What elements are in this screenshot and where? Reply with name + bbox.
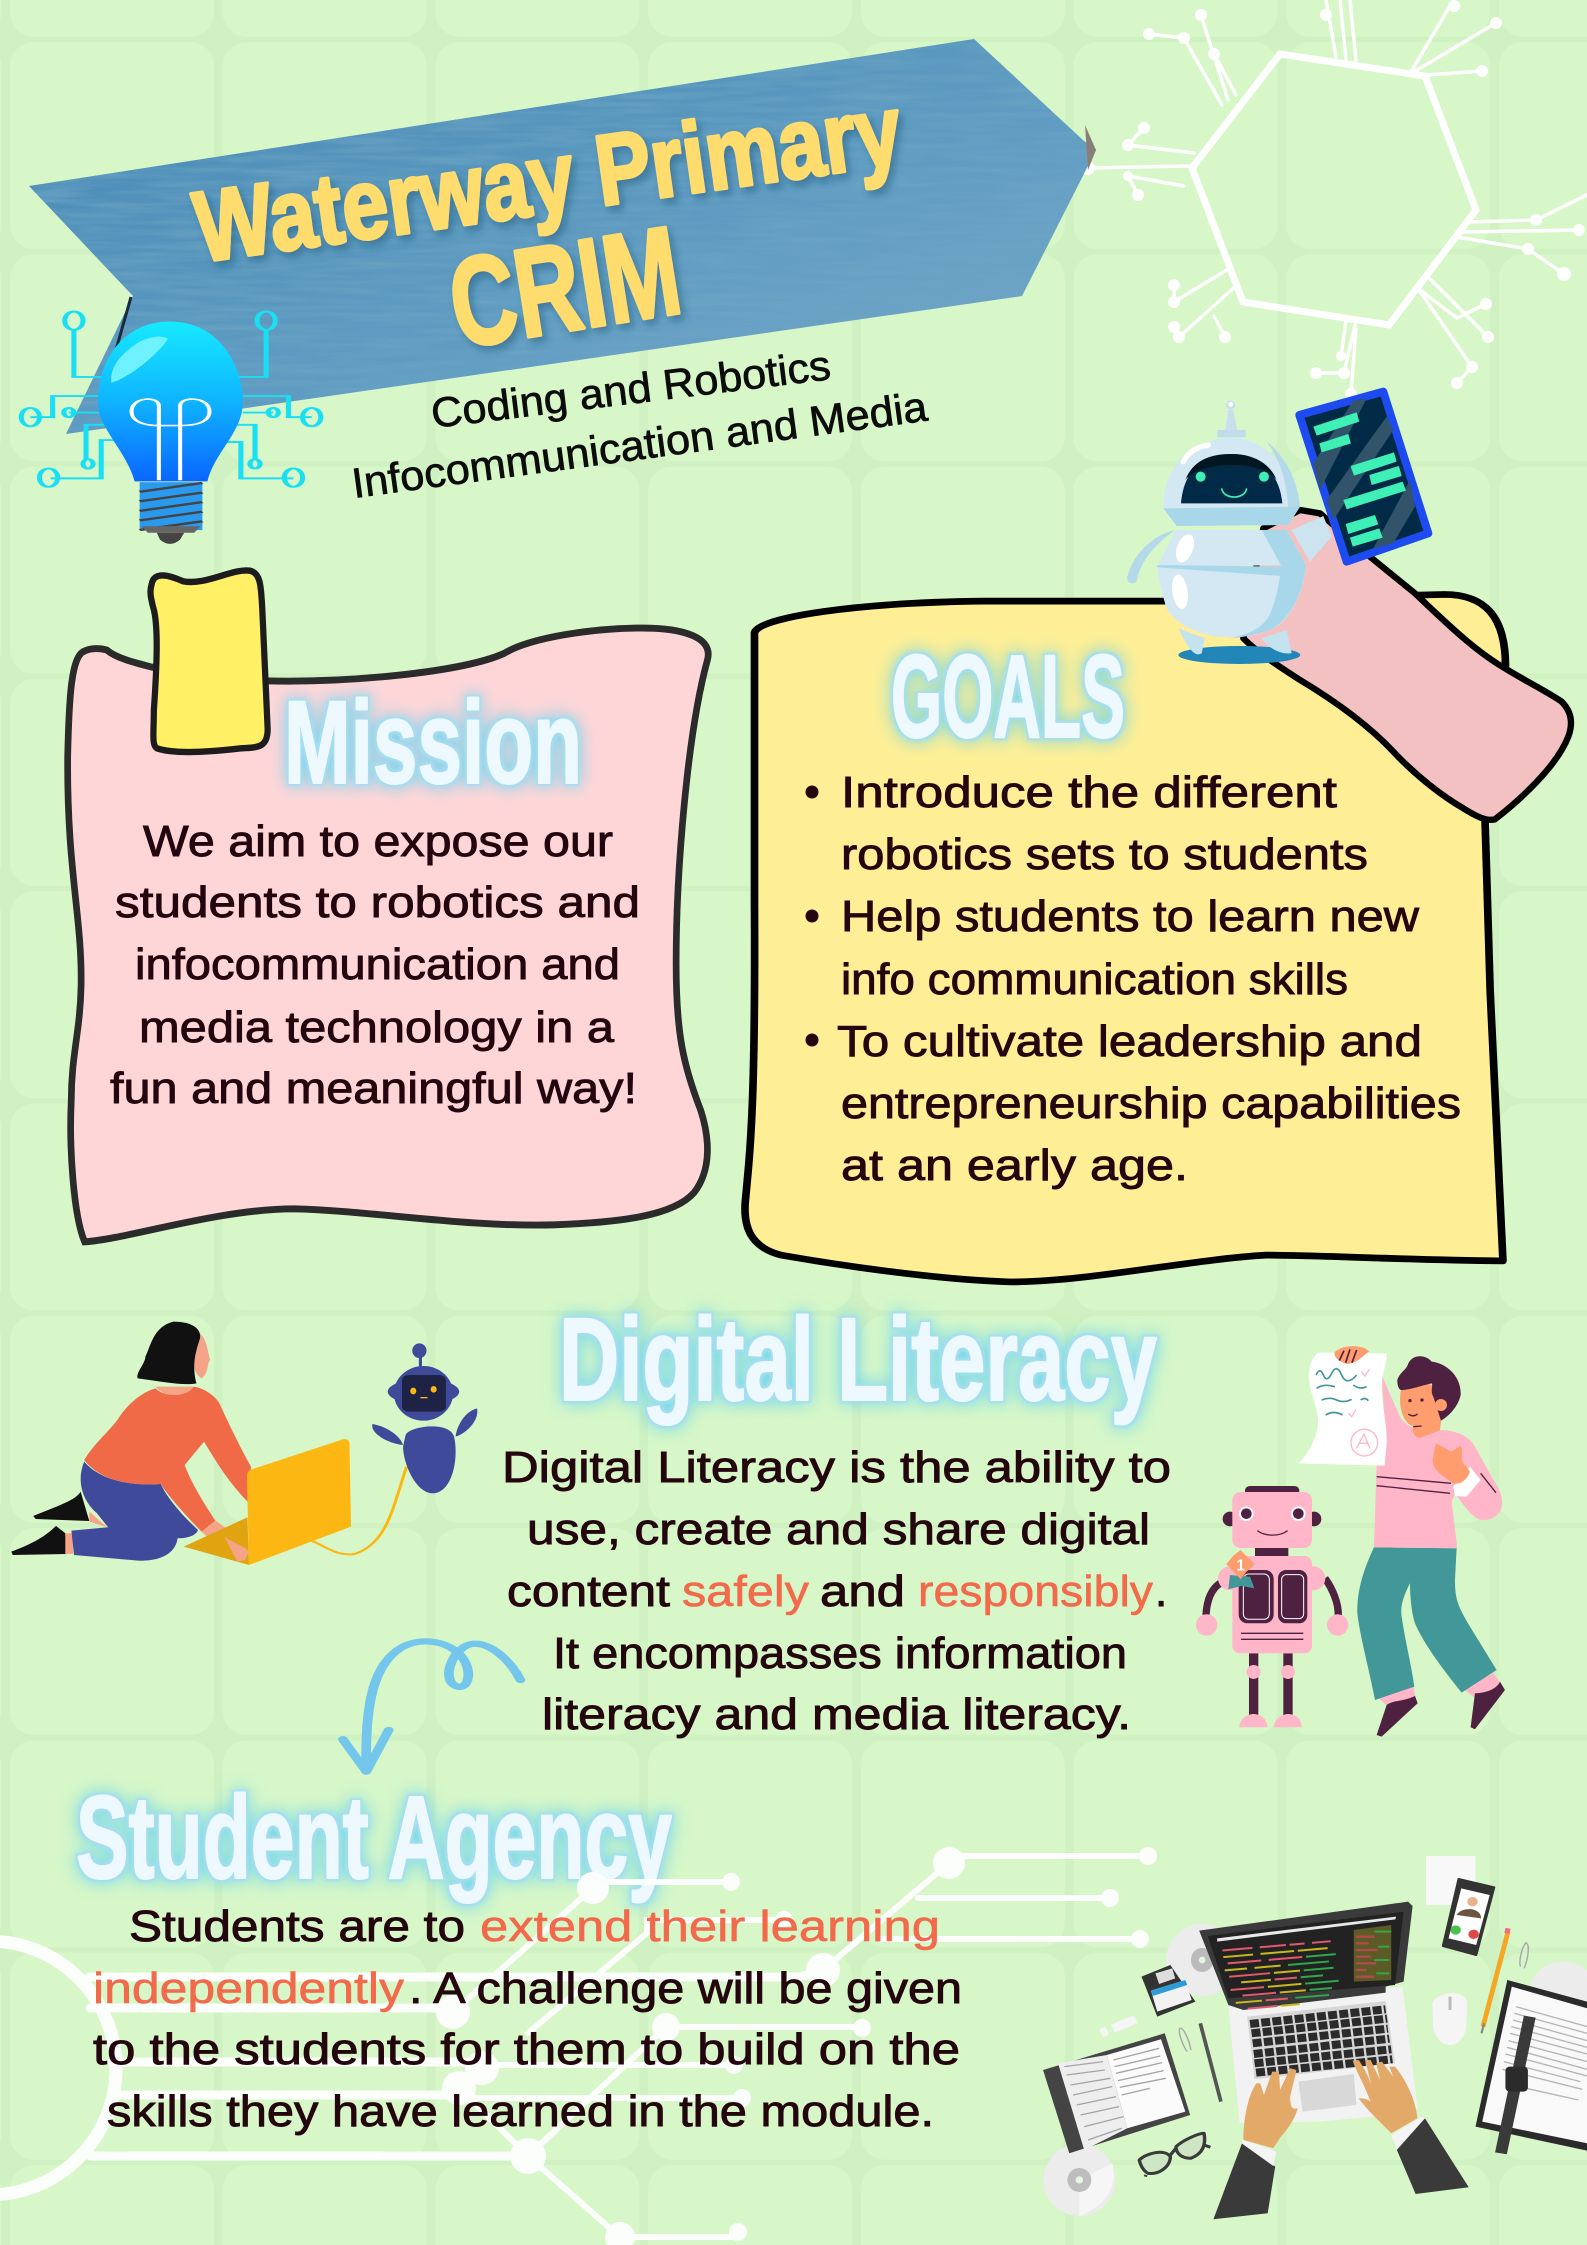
circuit lines, bottom left bbox=[0, 1847, 1157, 2245]
phone bbox=[1299, 392, 1428, 562]
goals list: info communication skills bbox=[841, 955, 1348, 1004]
CDs bbox=[1043, 1924, 1587, 2216]
illustration: robot and boy with graded paper bbox=[1196, 1346, 1505, 1737]
wooden sign banner with title bbox=[29, 39, 1096, 434]
heading: Student Agency: Student Agency bbox=[76, 1772, 672, 1904]
student agency text: independently bbox=[93, 1964, 404, 2013]
laptop bbox=[1199, 1902, 1417, 2123]
notepad and phone bbox=[1426, 1856, 1494, 1955]
illustration: arm holding robot and phone bbox=[1127, 392, 1571, 820]
goals note shape bbox=[745, 594, 1506, 1282]
student agency text: . A challenge will be given bbox=[409, 1964, 962, 2013]
student agency text: skills they have learned in the module. bbox=[107, 2087, 934, 2136]
mission text: students to robotics and bbox=[115, 878, 640, 927]
mission text: media technology in a bbox=[139, 1003, 615, 1052]
digital literacy text: content bbox=[507, 1567, 670, 1616]
goals list: Introduce the different bbox=[841, 768, 1337, 817]
digital literacy text: and bbox=[820, 1567, 905, 1616]
subtitle: Infocommunication and Media bbox=[349, 383, 931, 507]
icon: circuit light bulb bbox=[21, 312, 321, 544]
floppy disk and USB bbox=[1101, 1965, 1221, 2102]
digital literacy text: literacy and media literacy. bbox=[542, 1690, 1131, 1739]
open book bbox=[1043, 2033, 1190, 2153]
digital literacy text: . bbox=[1155, 1567, 1167, 1616]
mission text: infocommunication and bbox=[135, 940, 620, 989]
pink robot: 1 bbox=[1236, 1558, 1245, 1575]
arrow: curly arrow pointing down bbox=[343, 1641, 520, 1772]
illustration: desk with laptop and office items bbox=[1043, 1856, 1587, 2219]
student agency text: Students are to bbox=[129, 1902, 465, 1951]
student agency text: to the students for them to build on the bbox=[93, 2025, 960, 2074]
digital literacy text: use, create and share digital bbox=[527, 1505, 1150, 1554]
yellow laptop bbox=[184, 1439, 407, 1565]
pencil, mouse and clips bbox=[1179, 1928, 1528, 2052]
clipboard and watch bbox=[1475, 1980, 1587, 2153]
heading: Goals: GOALS bbox=[891, 631, 1125, 763]
glasses bbox=[1139, 2133, 1210, 2177]
boy bbox=[1298, 1346, 1505, 1737]
mission text: We aim to expose our bbox=[143, 817, 613, 866]
arm bbox=[1243, 510, 1571, 820]
digital literacy text: Digital Literacy is the ability to bbox=[502, 1443, 1171, 1492]
title: CRIM: CRIM bbox=[440, 199, 689, 375]
mission note shape bbox=[68, 570, 708, 1242]
subtitle: Coding and Robotics bbox=[428, 341, 833, 437]
panel: goals bbox=[745, 594, 1506, 1282]
goals list bbox=[806, 768, 1461, 1190]
student agency text bbox=[93, 1902, 962, 2136]
goals list: at an early age. bbox=[841, 1141, 1188, 1190]
heading: Digital Literacy: Digital Literacy bbox=[559, 1294, 1157, 1426]
student agency text: extend their learning bbox=[480, 1902, 940, 1951]
pink robot bbox=[1196, 1486, 1348, 1727]
digital literacy text: safely bbox=[682, 1567, 809, 1616]
mission text: fun and meaningful way! bbox=[110, 1064, 637, 1113]
hands and sleeves bbox=[1213, 2060, 1469, 2219]
title: Waterway Primary: Waterway Primary bbox=[187, 74, 908, 284]
woman bbox=[11, 1322, 251, 1562]
heading: Mission: Mission bbox=[284, 677, 582, 809]
panel: mission bbox=[68, 570, 708, 1242]
goals list: To cultivate leadership and bbox=[837, 1017, 1422, 1066]
goals list: Help students to learn new bbox=[841, 892, 1419, 941]
digital literacy text: responsibly bbox=[918, 1567, 1153, 1616]
digital literacy text: It encompasses information bbox=[553, 1629, 1127, 1678]
wood arrow shape bbox=[29, 39, 1096, 434]
goals list: robotics sets to students bbox=[841, 830, 1368, 879]
mission text bbox=[110, 817, 640, 1113]
yellow tape bbox=[150, 570, 268, 752]
robot bbox=[1127, 400, 1332, 664]
illustration: woman with laptop and robot bbox=[11, 1322, 477, 1565]
circuit hexagon, top right bbox=[1081, 0, 1587, 400]
goals list: entrepreneurship capabilities bbox=[841, 1079, 1461, 1128]
digital literacy text bbox=[502, 1443, 1171, 1739]
small blue robot bbox=[372, 1343, 477, 1493]
